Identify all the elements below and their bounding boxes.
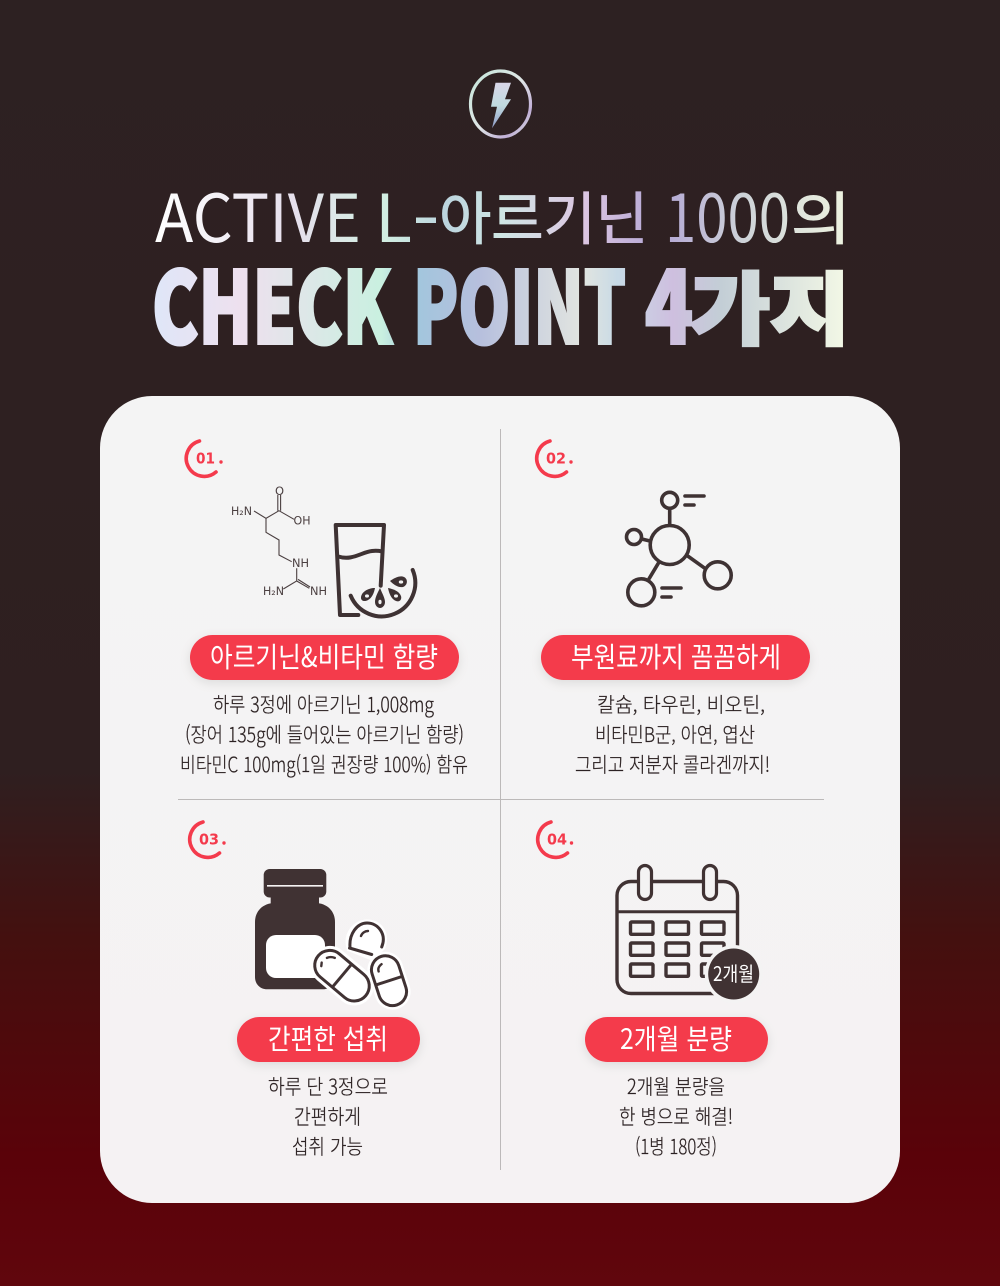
icon: arginine molecule: O [275,484,284,498]
title line 2: CHECK [152,228,393,372]
body text 01: 하루 3정에 아르기닌 1,008mg [213,688,434,718]
icon: lightning bolt in ring [470,71,530,137]
title line 1 [155,166,851,262]
title line 1: 1000 [665,166,790,262]
badge 03 [190,822,226,857]
body text 04: 2개월 분량을 [627,1070,725,1100]
title line 1: 아르기닌 [439,174,648,256]
title line 2: 가지 [690,246,850,361]
pill label 03: 간편한 섭취 [268,1018,388,1058]
title line 2: 4 [645,228,693,372]
title line 1: ACTIVE [155,166,361,262]
body text 02: 그리고 저분자 콜라겐까지! [575,748,770,778]
body text 01 [180,688,468,778]
body text 04 [619,1070,733,1160]
title line 1: 의 [791,174,851,256]
card 03 [190,822,420,1160]
pill label 04: 2개월 분량 [620,1018,732,1058]
icon: arginine molecule [231,484,327,598]
badge 02 [537,441,573,476]
badge 04 [538,822,573,857]
body text 04: (1병 180정) [635,1130,717,1160]
pill label 04 [585,1017,768,1062]
icon: calendar with 2개월 badge: 2개월 [713,958,754,987]
icon: water glass and citrus [336,525,415,616]
icon: arginine molecule: H₂N [263,584,284,598]
card 01 [180,441,468,778]
panel: check points [100,396,900,1203]
body text 01: 비타민C 100mg(1일 권장량 100%) 함유 [180,748,468,778]
body text 01: (장어 135g에 들어있는 아르기닌 함량) [185,718,464,748]
icon: arginine molecule: NH [310,584,327,598]
pill label 01: 아르기닌&비타민 함량 [210,636,438,676]
capsule: diagonal [309,944,375,1007]
body text 02: 칼슘, 타우린, 비오틴, [597,688,765,718]
card 02 [537,441,810,778]
capsule: open half [349,923,383,957]
card 04 [538,822,768,1160]
title line 2 [152,228,850,372]
badge 01: 01 [196,450,215,468]
title line 1: L [375,166,412,262]
body text 04: 한 병으로 해결! [619,1100,733,1130]
capsule: upright [368,952,410,1009]
body text 02 [575,688,770,778]
body text 03 [268,1070,388,1160]
body text 03: 간편하게 [294,1100,361,1130]
icon: calendar with 2개월 badge [617,866,763,1003]
badge 04: 04 [547,830,567,848]
icon: molecule nodes [626,492,731,606]
badge 03: 03 [199,830,219,848]
icon: arginine molecule: H₂N [231,504,252,518]
icon: arginine molecule: OH [294,514,310,528]
badge 01 [186,441,223,476]
body text 02: 비타민B군, 아연, 엽산 [595,718,755,748]
title line 2: POINT [413,228,626,372]
badge 02: 02 [546,450,566,468]
icon: arginine molecule: NH [292,556,309,570]
body text 03: 하루 단 3정으로 [268,1070,388,1100]
icon: supplement bottle and capsules [255,869,410,1009]
pill label 02: 부원료까지 꼼꼼하게 [571,636,781,676]
body text 03: 섭취 가능 [292,1130,363,1160]
pill label 03 [237,1017,420,1062]
